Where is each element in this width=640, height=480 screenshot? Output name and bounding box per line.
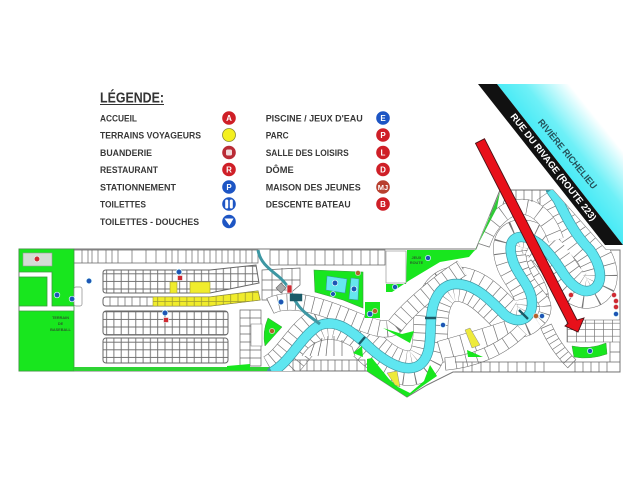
green areas <box>227 192 607 397</box>
northern loop lots <box>482 207 556 245</box>
legend item: piscine: PISCINE / JEUX D'EAU <box>266 114 363 124</box>
legend item: descente bateau <box>266 197 390 211</box>
inner loop lots <box>520 255 545 322</box>
river <box>258 190 600 372</box>
legend item: accueil: A <box>226 114 232 123</box>
yellow sites block 2 <box>153 291 260 306</box>
legend item: piscine <box>266 111 390 125</box>
legend item: piscine: E <box>380 114 386 123</box>
stream <box>258 250 320 324</box>
block 4 <box>103 338 228 363</box>
legend item: toilettes douches: TOILETTES - DOUCHES <box>100 217 200 228</box>
road strip <box>478 84 623 245</box>
fan lots south of river <box>293 360 365 371</box>
legend item: salle des loisirs <box>266 146 390 159</box>
green park with pools <box>314 270 363 308</box>
legend item: toilettes: TOILETTES <box>100 200 147 210</box>
legend item: maison des jeunes: MAISON DES JEUNES <box>266 182 361 194</box>
site map <box>19 190 620 397</box>
field label: BASEBALL <box>50 328 72 332</box>
map markers <box>34 255 619 354</box>
legend item: dome: D <box>380 166 386 174</box>
green zone west <box>19 249 272 371</box>
river richelieu and road band <box>478 84 623 245</box>
river label: RIVIÈRE RICHELIEU <box>536 117 600 191</box>
blue markers <box>54 255 619 354</box>
brown markers <box>269 270 539 334</box>
field label: TERRAIN <box>52 316 69 320</box>
service building <box>276 283 286 293</box>
pool 1 <box>326 276 347 293</box>
lots east of campground <box>240 310 261 366</box>
legend item: dome: DÔME <box>266 164 294 176</box>
legend <box>100 90 390 228</box>
river-side lots <box>270 190 620 372</box>
legend item: toilettes douches <box>100 215 236 228</box>
road band lots north <box>270 268 462 329</box>
campground grid <box>103 265 262 366</box>
legend item: maison des jeunes <box>266 180 390 194</box>
legend item: descente bateau: DESCENTE BATEAU <box>266 200 351 210</box>
legend item: restaurant: RESTAURANT <box>100 165 158 176</box>
south lots <box>440 328 518 352</box>
legend item: maison des jeunes: MJ <box>378 183 388 192</box>
legend item: restaurant: R <box>226 166 232 174</box>
legend item: terrains voyageurs: TERRAINS VOYAGEURS <box>100 130 202 142</box>
lower lots band <box>445 330 522 364</box>
red arrow <box>476 139 584 332</box>
block 2 <box>103 291 260 306</box>
legend item: descente bateau: B <box>380 200 386 209</box>
legend item: dome <box>266 163 390 176</box>
legend item: accueil <box>100 111 236 125</box>
legend item: parc <box>266 128 390 142</box>
bottom row lots <box>455 362 620 372</box>
block 3 <box>103 311 228 335</box>
legend item: stationnement: STATIONNEMENT <box>100 182 176 194</box>
top row of lots <box>74 250 258 263</box>
legend item: restaurant <box>100 163 236 176</box>
legend item: stationnement <box>100 180 236 194</box>
legend item: parc: P <box>380 131 386 140</box>
green area label: JEUX <box>412 256 422 260</box>
bridges <box>291 295 528 344</box>
legend item: buanderie <box>100 146 236 159</box>
legend item: parc: PARC <box>266 130 289 142</box>
land base <box>19 190 620 397</box>
pool 2 <box>349 278 359 300</box>
legend item: stationnement: P <box>226 183 232 192</box>
legend item: accueil: ACCUEIL <box>100 114 137 124</box>
field label: DE <box>58 322 64 326</box>
block 1 <box>103 265 259 293</box>
top lots row <box>500 190 548 204</box>
lots north of stream <box>262 268 300 300</box>
yellow lots <box>387 328 480 387</box>
grid lots south-east <box>567 320 620 342</box>
road label: RUE DU RIVAGE (ROUTE 223) <box>508 111 599 223</box>
water area <box>497 84 623 245</box>
red markers <box>34 256 619 322</box>
angled lots <box>546 326 572 364</box>
legend item: salle des loisirs: L <box>381 148 386 158</box>
legend heading: LÉGENDE: <box>100 90 164 106</box>
legend item: buanderie: BUANDERIE <box>100 148 153 159</box>
green area label: ROUTE <box>410 261 424 265</box>
yellow sites block 1 <box>170 282 210 293</box>
legend item: salle des loisirs: SALLE DES LOISIRS <box>266 148 349 159</box>
legend item: toilettes <box>100 197 236 211</box>
